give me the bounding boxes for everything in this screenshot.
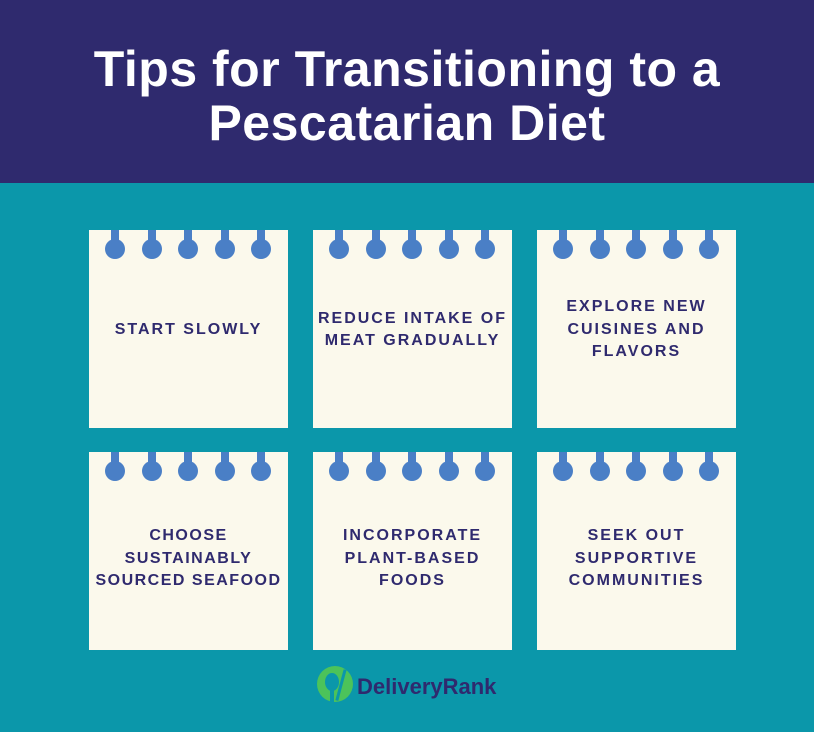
logo bbox=[317, 666, 497, 702]
card: plant-based: PLANT-BASED bbox=[345, 550, 480, 567]
title: Tips for Transitioning to a bbox=[94, 41, 720, 97]
card: communities: SUPPORTIVE bbox=[575, 550, 698, 567]
card: explore cuisines: FLAVORS bbox=[592, 343, 681, 360]
card: reduce meat: MEAT GRADUALLY bbox=[325, 332, 500, 349]
card: start slowly bbox=[89, 230, 288, 428]
card: communities bbox=[537, 452, 736, 650]
card: plant-based bbox=[313, 452, 512, 650]
card: communities: SEEK OUT bbox=[588, 527, 685, 544]
card: explore cuisines: CUISINES AND bbox=[567, 321, 706, 338]
card: plant-based: INCORPORATE bbox=[343, 527, 482, 544]
title bbox=[94, 41, 720, 151]
card: communities: COMMUNITIES bbox=[569, 572, 704, 589]
card: start slowly: START SLOWLY bbox=[115, 321, 262, 338]
logo: DeliveryRank bbox=[357, 674, 497, 699]
card: sustainable seafood: SUSTAINABLY bbox=[125, 550, 252, 567]
header band bbox=[0, 0, 814, 183]
card: sustainable seafood: SOURCED SEAFOOD bbox=[95, 572, 282, 589]
card: reduce meat: REDUCE INTAKE OF bbox=[318, 310, 507, 326]
card: reduce meat bbox=[313, 230, 512, 428]
card: explore cuisines: EXPLORE NEW bbox=[566, 298, 707, 315]
card: sustainable seafood bbox=[89, 452, 288, 650]
card: explore cuisines bbox=[537, 230, 736, 428]
card: sustainable seafood: CHOOSE bbox=[149, 527, 228, 544]
card: plant-based: FOODS bbox=[379, 572, 446, 589]
title: Pescatarian Diet bbox=[208, 95, 606, 151]
